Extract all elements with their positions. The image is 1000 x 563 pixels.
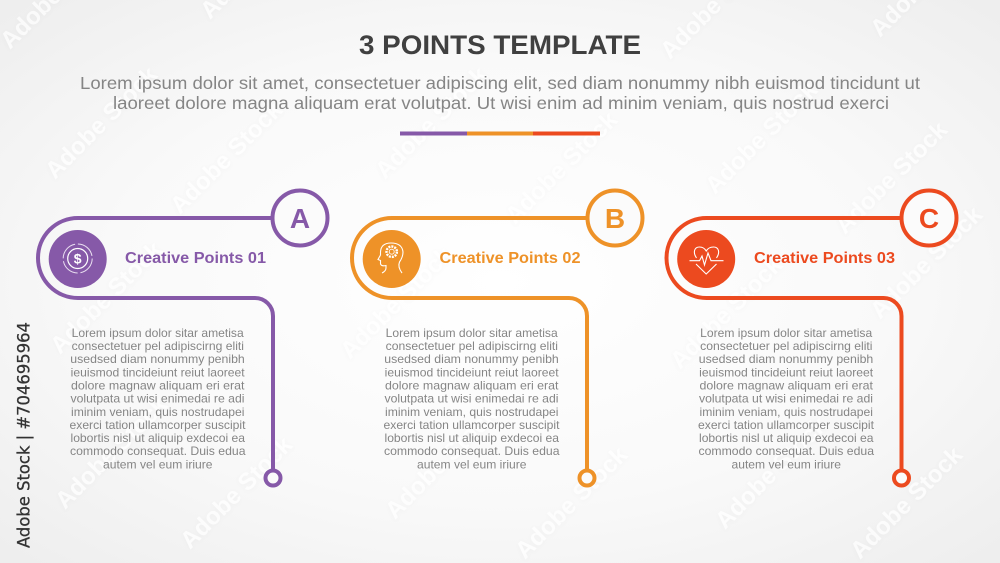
watermarks: Adobe Stock <box>50 391 173 514</box>
badge B: B <box>605 203 625 234</box>
body text C: exerci tation ullamcorper suscipit <box>698 419 875 432</box>
body text C: autem vel eum iriure <box>732 458 841 471</box>
badge C: C <box>919 203 939 234</box>
watermarks: Adobe Stock <box>510 441 633 563</box>
body text B: volutpata ut wisi enimedai re adi <box>384 393 558 406</box>
icon: dollar coin <box>49 230 107 288</box>
body text C: usedsed diam nonummy penibh <box>699 353 873 366</box>
badge B <box>588 190 642 246</box>
watermarks: Adobe Stock <box>865 201 988 324</box>
body text A <box>70 327 246 471</box>
divider bar <box>400 132 600 136</box>
end dot C <box>894 470 909 486</box>
body text A: ieuismod tincideiunt reiut laoreet <box>71 366 246 379</box>
watermarks: Adobe Stock <box>500 106 623 229</box>
body text B: consectetuer pel adipiscirng eliti <box>386 340 558 353</box>
body text C: iminim veniam, quis nostrudapei <box>700 406 873 419</box>
body text B: autem vel eum iriure <box>417 458 526 471</box>
connector line B <box>352 218 587 470</box>
body text B: iminim veniam, quis nostrudapei <box>385 406 558 419</box>
watermarks: Adobe Stock <box>370 61 493 184</box>
body text B <box>384 327 560 471</box>
body text C: commodo consequat. Duis edua <box>698 445 875 458</box>
body text C <box>698 327 875 471</box>
watermarks: Adobe Stock <box>45 236 168 359</box>
title: 3 POINTS TEMPLATE <box>359 30 641 60</box>
body text C: dolore magnaw aliquam eri erat <box>700 380 874 392</box>
heading A: Creative Points 01 <box>125 250 266 267</box>
body text B: exerci tation ullamcorper suscipit <box>384 419 560 432</box>
connector line A <box>38 218 273 470</box>
stock id side label: Adobe Stock | #704695964 <box>14 322 34 548</box>
panel: point C <box>666 190 956 486</box>
body text A: dolore magnaw aliquam eri erat <box>71 380 245 392</box>
watermarks: Adobe Stock <box>665 251 788 374</box>
watermarks: Adobe Stock <box>40 61 163 184</box>
subtitle: Lorem ipsum dolor sit amet, consectetuer adipiscing elit, sed diam nonummy nibh euismod tincidunt ut <box>80 73 920 93</box>
badge C <box>902 190 956 246</box>
body text A: exerci tation ullamcorper suscipit <box>70 419 246 432</box>
badge A: A <box>290 203 310 234</box>
body text B: ieuismod tincideiunt reiut laoreet <box>385 366 560 379</box>
icon: head with gear <box>363 230 421 288</box>
body text B: Lorem ipsum dolor sitar ametisa <box>386 327 558 340</box>
body text C: ieuismod tincideiunt reiut laoreet <box>699 366 874 379</box>
end dot A <box>266 470 280 486</box>
body text C: consectetuer pel adipiscirng eliti <box>700 340 873 353</box>
body text B: usedsed diam nonummy penibh <box>384 353 559 366</box>
body text C: Lorem ipsum dolor sitar ametisa <box>700 327 873 340</box>
connector line C <box>666 218 902 470</box>
icon: heart with pulse <box>677 230 735 288</box>
body text A: consectetuer pel adipiscirng eliti <box>72 340 244 353</box>
body text B: commodo consequat. Duis edua <box>384 445 560 458</box>
subtitle <box>80 73 920 113</box>
watermarks: Adobe Stock <box>175 431 298 554</box>
heading B: Creative Points 02 <box>440 250 581 267</box>
watermarks: Adobe Stock <box>845 441 968 563</box>
watermarks: Adobe Stock <box>165 96 288 219</box>
body text A: commodo consequat. Duis edua <box>70 445 246 458</box>
body text B: lobortis nisl ut aliquip exdecoi ea <box>384 432 560 445</box>
body text A: Lorem ipsum dolor sitar ametisa <box>72 327 244 340</box>
watermarks: Adobe Stock <box>380 401 503 524</box>
body text C: lobortis nisl ut aliquip exdecoi ea <box>699 432 874 445</box>
icon: dollar coin: $ <box>74 250 82 266</box>
watermarks: Adobe Stock <box>830 116 953 239</box>
body text A: volutpata ut wisi enimedai re adi <box>70 393 244 406</box>
watermarks: Adobe Stock <box>710 411 833 534</box>
body text A: iminim veniam, quis nostrudapei <box>71 406 244 419</box>
body text B: dolore magnaw aliquam eri erat <box>385 380 559 392</box>
panel: point B <box>352 190 642 486</box>
end dot B <box>580 470 594 486</box>
body text A: lobortis nisl ut aliquip exdecoi ea <box>70 432 246 445</box>
body text A: autem vel eum iriure <box>103 458 212 471</box>
heading C: Creative Points 03 <box>754 250 895 267</box>
watermarks: Adobe Stock <box>335 241 458 364</box>
body text C: volutpata ut wisi enimedai re adi <box>699 393 873 406</box>
body text A: usedsed diam nonummy penibh <box>70 353 245 366</box>
watermarks: Adobe Stock <box>700 76 823 199</box>
badge A <box>272 190 328 246</box>
panel: point A <box>38 190 328 486</box>
subtitle: laoreet dolore magna aliquam erat volutpat. Ut wisi enim ad minim veniam, quis nostrud exerci <box>113 93 889 113</box>
